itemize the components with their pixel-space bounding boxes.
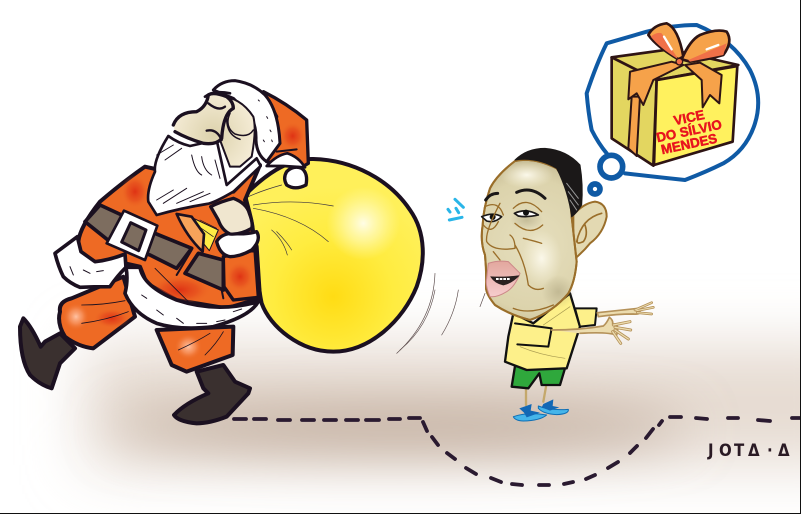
- facial lines: [483, 202, 553, 311]
- man body: [400, 290, 653, 421]
- motion lines: [400, 290, 485, 350]
- hat: [213, 81, 308, 168]
- cuff: [217, 232, 258, 257]
- gift label: DO SÍLVIO: [655, 117, 723, 145]
- gift label: MENDES: [660, 131, 719, 157]
- front leg: [157, 327, 250, 423]
- gift box: [612, 23, 738, 166]
- man head: [482, 148, 607, 320]
- shoes: [513, 399, 568, 421]
- ground shadow: [85, 345, 801, 465]
- signature: JOTΔ·Δ: [707, 440, 790, 460]
- thought bubble: [448, 23, 758, 220]
- sleeve: [222, 250, 258, 300]
- gift label: VICE: [672, 107, 706, 128]
- coat: [78, 165, 260, 308]
- santa claus: [20, 81, 435, 423]
- beard: [148, 136, 261, 215]
- eyes: [482, 210, 538, 222]
- gift label: [655, 107, 723, 157]
- hand: [211, 198, 252, 234]
- face: [482, 160, 577, 320]
- santa face: [173, 92, 255, 167]
- legs: [526, 387, 546, 405]
- motion lines: [397, 273, 435, 353]
- ear: [573, 202, 607, 260]
- arms and hands: [552, 303, 653, 343]
- coat fur trim: [55, 237, 258, 328]
- sweat drops: [448, 199, 463, 220]
- shorts: [512, 366, 565, 388]
- pompom: [285, 167, 307, 188]
- gift sack: [245, 159, 423, 352]
- belt and buckle: [85, 205, 223, 290]
- ground dashes: [234, 417, 800, 485]
- eyebrows: [486, 190, 545, 200]
- hair: [515, 148, 582, 217]
- mouth: [486, 261, 520, 297]
- yellow shirt: [505, 293, 597, 370]
- back leg: [20, 277, 135, 388]
